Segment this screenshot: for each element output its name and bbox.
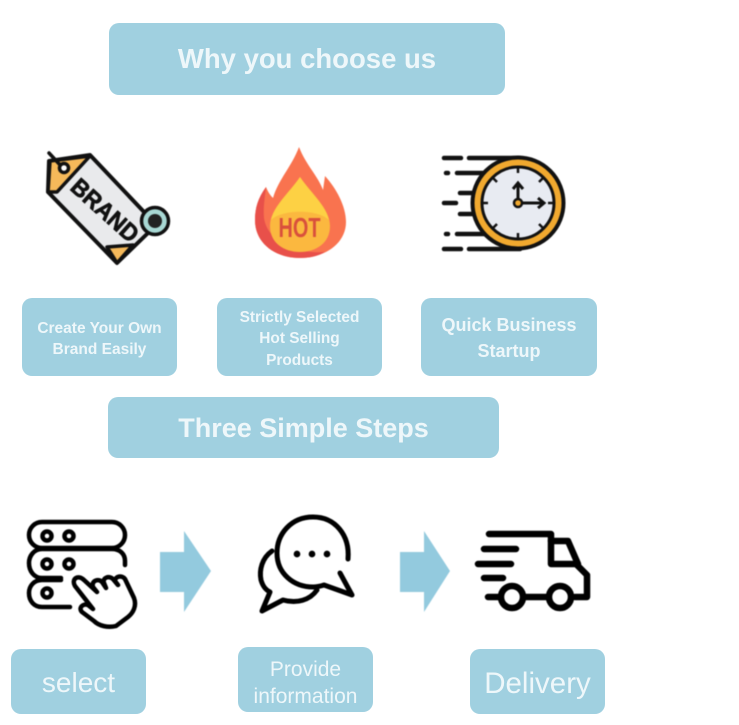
icon: fast clock [444,158,564,249]
label: Provide information: information [254,684,357,708]
label: Provide information [238,647,373,712]
title: Why you choose us [109,23,505,95]
label: Quick Business Startup [421,298,597,376]
text: BRAND: BRAND [65,173,144,248]
label: Quick Business Startup: Startup [478,341,540,361]
label: Provide information: Provide [270,658,341,680]
title: Why you choose us: Why you choose us [178,43,436,74]
icon: delivery truck [478,534,587,608]
arrow: step one to step two [160,531,211,612]
label: Delivery [470,649,605,714]
icon: speech bubbles [260,517,352,611]
heading: Three Simple Steps [108,397,499,458]
label: Create Your Own Brand Easily: Brand Easily [53,341,146,358]
label: Create Your Own Brand Easily [22,298,177,376]
label: Create Your Own Brand Easily: Create Your Own [37,320,162,337]
label: Strictly Selected Hot Selling Products: Hot Selling [259,330,340,347]
arrow: step two to step three [400,531,450,612]
icon: hot flame [255,147,346,258]
heading: Three Simple Steps: Three Simple Steps [178,413,429,443]
label: Strictly Selected Hot Selling Products [217,298,382,376]
label: Strictly Selected Hot Selling Products: Strictly Selected [240,309,359,326]
text: HOT: HOT [278,212,320,243]
label: select [11,649,146,714]
icon: brand tag [48,153,168,263]
label: Quick Business Startup: Quick Business [441,315,577,335]
label: select: select [42,667,115,698]
icon: select list with hand [29,522,135,627]
label: Delivery: Delivery [484,666,591,700]
label: Strictly Selected Hot Selling Products: Products [266,352,333,369]
